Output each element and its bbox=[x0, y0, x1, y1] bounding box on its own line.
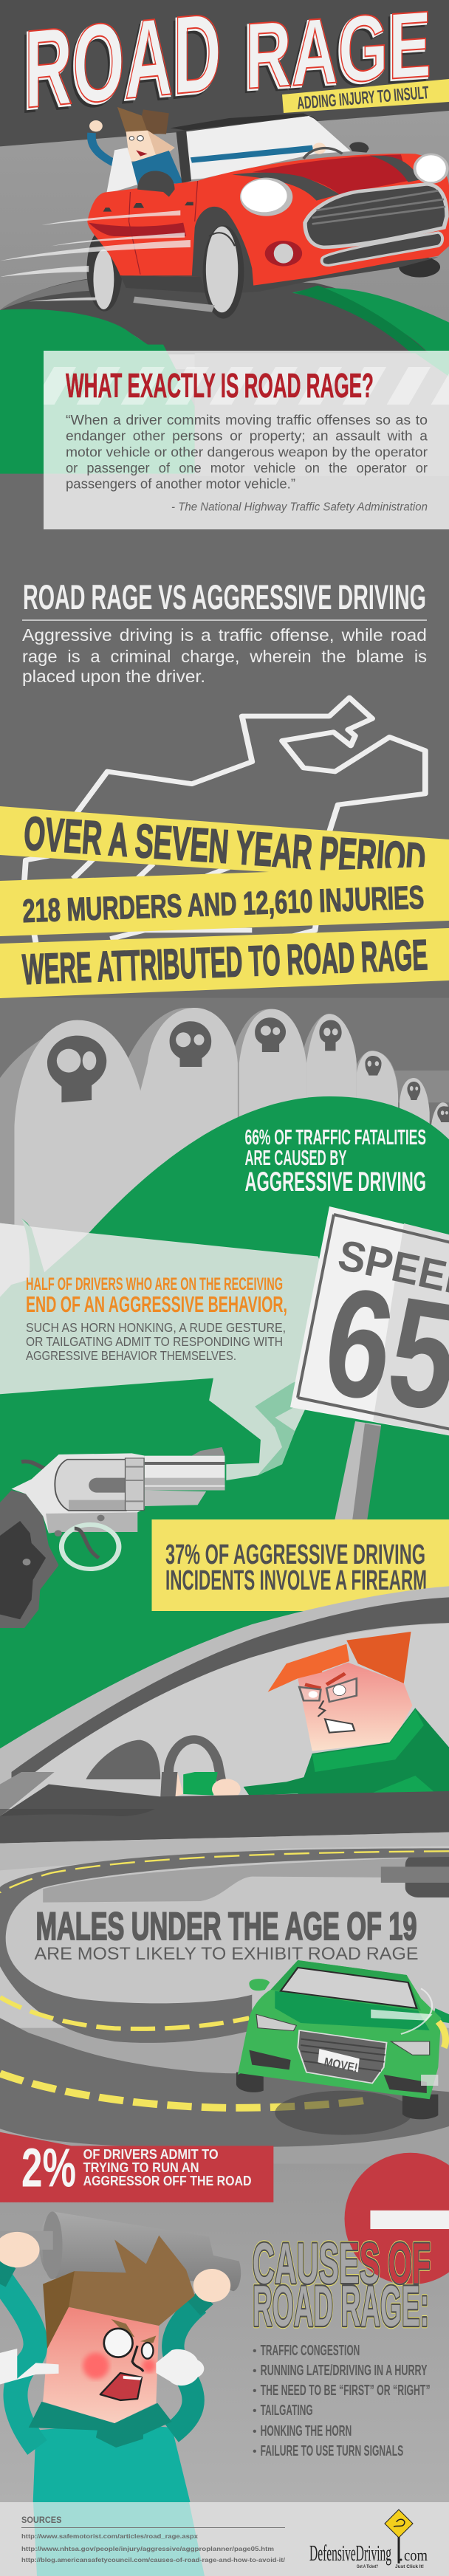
list: causes: • bbox=[253, 2445, 257, 2458]
list: causes: • bbox=[253, 2405, 257, 2417]
logo: DefensiveDriving.com: Just Click It! bbox=[395, 2565, 424, 2569]
quote text: endanger other persons or property; an assault with a bbox=[66, 429, 428, 444]
green background with blob bbox=[0, 1096, 449, 1777]
section: road rage vs aggressive driving bbox=[0, 529, 449, 721]
list: causes: • bbox=[253, 2345, 257, 2357]
attribution: - The National Highway Traffic Safety Administration bbox=[171, 501, 428, 514]
stat: 2 percent: TRYING TO RUN AN bbox=[83, 2160, 199, 2175]
stat: 2 percent: AGGRESSOR OFF THE ROAD bbox=[83, 2173, 252, 2188]
front wheel bbox=[203, 225, 244, 319]
illustration: green car bbox=[236, 1960, 449, 2119]
plate text: MOVE! bbox=[323, 2055, 359, 2075]
tape 3 bbox=[0, 928, 449, 998]
quote text bbox=[66, 413, 428, 492]
illustration: chalk outline bbox=[24, 698, 425, 943]
tape 1 bbox=[0, 806, 449, 873]
caution tape stats bbox=[0, 806, 449, 998]
mirror silhouette bbox=[381, 1855, 449, 1897]
hero background bbox=[0, 0, 449, 369]
source links: http://blog.americansafetycouncil.com/causes-of-road-rage-and-how-to-avoid-it/ bbox=[21, 2556, 286, 2563]
inner road patch bbox=[43, 1857, 449, 1903]
gray body text: AGGRESSIVE BEHAVIOR THEMSELVES. bbox=[26, 1348, 236, 1363]
logo: DefensiveDriving.com: Got A Ticket? bbox=[357, 2565, 378, 2569]
sign post bbox=[335, 1421, 381, 1521]
driver hair bbox=[268, 1632, 411, 1692]
driver face bbox=[298, 1663, 412, 1751]
source links bbox=[21, 2532, 286, 2563]
list: causes: TAILGATING bbox=[261, 2402, 313, 2419]
gray body text: SUCH AS HORN HONKING, A RUDE GESTURE, bbox=[26, 1320, 286, 1335]
list: causes: TRAFFIC CONGESTION bbox=[261, 2343, 360, 2359]
icon: angry driver arm and head bbox=[89, 107, 183, 185]
lower background bbox=[0, 2126, 449, 2505]
list: causes: HONKING THE HORN bbox=[261, 2423, 352, 2439]
speed lines bbox=[0, 210, 191, 301]
list: causes: • bbox=[253, 2425, 257, 2438]
quote text: motor vehicle or other dangerous weapon by the operator bbox=[66, 444, 428, 459]
quote text: passengers of another motor vehicle.” bbox=[66, 477, 295, 492]
speed limit sign bbox=[290, 1206, 449, 1444]
quote text: or passenger of one motor vehicle on the operator or bbox=[66, 461, 428, 475]
smoke panel: half of drivers: END OF AN AGGRESSIVE BEHAVIOR, bbox=[26, 1291, 287, 1317]
stat: 2 percent bbox=[21, 2137, 252, 2199]
source links: http://www.nhtsa.gov/people/injury/aggressive/aggproplanner/page05.htm bbox=[21, 2545, 275, 2552]
callout: 37 percent firearm bbox=[152, 1519, 449, 1611]
smoke panel: half of drivers bbox=[0, 1218, 343, 1480]
winding road upper bbox=[0, 1848, 449, 2043]
orange headline: HALF OF DRIVERS WHO ARE ON THE RECEIVING bbox=[26, 1274, 283, 1294]
stat: 66 percent of traffic fatalities: ARE CAUSED BY bbox=[245, 1147, 347, 1170]
grille bbox=[265, 184, 447, 267]
lower scene background bbox=[0, 1772, 449, 2156]
angry man figure bbox=[0, 2211, 241, 2504]
sweater bbox=[298, 1708, 449, 1796]
tombstones and skulls bbox=[0, 1008, 449, 1260]
door mirror bbox=[137, 171, 175, 197]
steering wheel bbox=[166, 1739, 226, 1807]
source links: http://www.safemotorist.com/articles/road_rage.aspx bbox=[21, 2532, 198, 2540]
no entry sign bbox=[345, 2153, 449, 2284]
winding road lower bbox=[0, 2018, 449, 2149]
logo: DefensiveDriving.com bbox=[309, 2510, 428, 2569]
heading: causes of road rage bbox=[253, 2240, 431, 2329]
description bbox=[22, 625, 427, 686]
description: rage is a criminal charge, wherein the blame is bbox=[22, 647, 427, 666]
list: causes: • bbox=[253, 2385, 257, 2397]
gray body text: OR TAILGATING ADMIT TO RESPONDING WITH bbox=[26, 1334, 283, 1349]
illustration: car interior with angry driver bbox=[0, 1586, 449, 1910]
headline: males under 19 bbox=[34, 1905, 418, 1964]
footer: sources and logo bbox=[0, 2502, 449, 2576]
stat: 66 percent of traffic fatalities bbox=[245, 1126, 426, 1197]
background below tape bbox=[0, 998, 449, 1260]
headline: males under 19: ARE MOST LIKELY TO EXHIBIT ROAD RAGE bbox=[34, 1944, 418, 1964]
rear and far tyres bbox=[87, 227, 440, 312]
illustration: red car and angry driver bbox=[0, 107, 449, 319]
green verge behind panel bbox=[0, 345, 449, 476]
headlights bbox=[240, 154, 449, 216]
red banner shape bbox=[0, 2132, 273, 2202]
stat: 2 percent: 2% bbox=[21, 2137, 76, 2199]
panel: what exactly is road rage bbox=[44, 351, 449, 529]
tape 2 bbox=[0, 866, 449, 936]
sources heading: SOURCES bbox=[21, 2515, 62, 2525]
description: Aggressive driving is a traffic offense, while road bbox=[22, 625, 427, 645]
quote text: “When a driver commits moving traffic offenses so as to bbox=[66, 413, 428, 427]
post shade bbox=[352, 1423, 381, 1521]
list: causes bbox=[253, 2343, 431, 2459]
description: placed upon the driver. bbox=[22, 667, 205, 686]
logo: DefensiveDriving.com: com bbox=[404, 2546, 428, 2564]
stat: 2 percent: OF DRIVERS ADMIT TO bbox=[83, 2146, 219, 2162]
dashboard bbox=[0, 1772, 449, 1844]
gray body text bbox=[26, 1320, 286, 1363]
illustration: revolver bbox=[0, 1447, 224, 1628]
list: causes: • bbox=[253, 2365, 257, 2377]
